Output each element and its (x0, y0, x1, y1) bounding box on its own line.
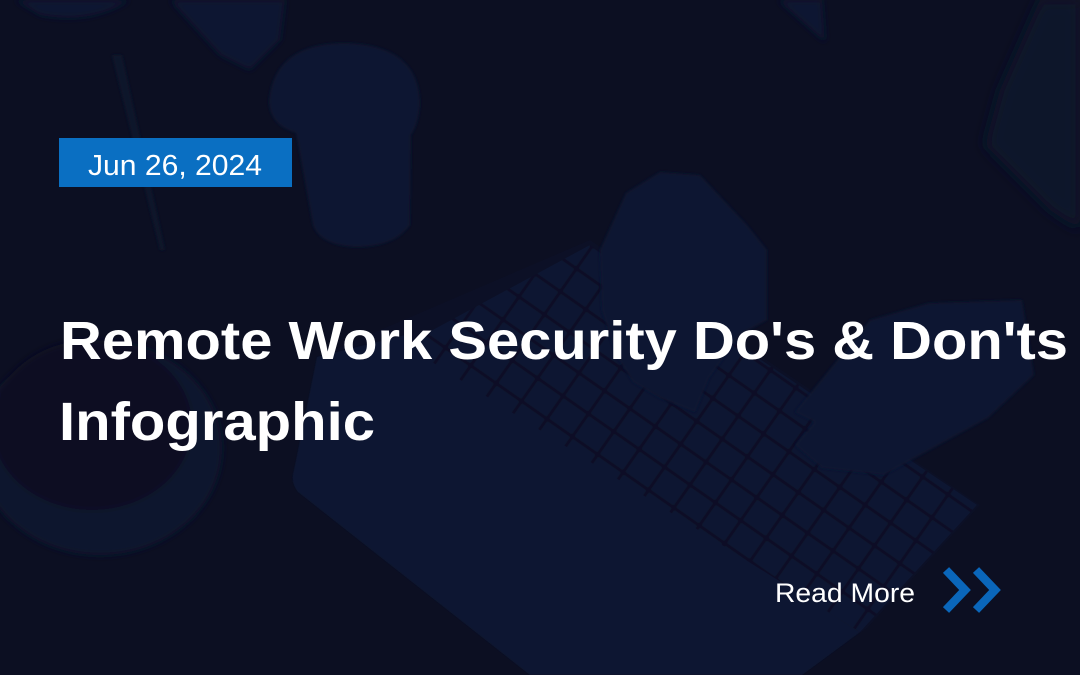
icon: double chevron arrow (946, 570, 995, 610)
laptop body (294, 240, 980, 675)
pen (112, 55, 165, 250)
title (59, 311, 1068, 452)
date badge: Jun 26, 2024 (88, 150, 262, 182)
top shapes (15, 0, 825, 70)
read more link: Read More (775, 578, 915, 608)
title: Infographic (59, 392, 375, 452)
title: Remote Work Security Do's & Don'ts (60, 311, 1068, 371)
date badge (59, 138, 292, 187)
hand at keyboard (600, 172, 767, 412)
right sleeve (985, 0, 1080, 230)
laptop palm rest (293, 335, 860, 675)
glass (0, 340, 222, 555)
keyboard (412, 246, 976, 632)
right hand (795, 300, 1034, 475)
coffee cup (269, 43, 420, 247)
